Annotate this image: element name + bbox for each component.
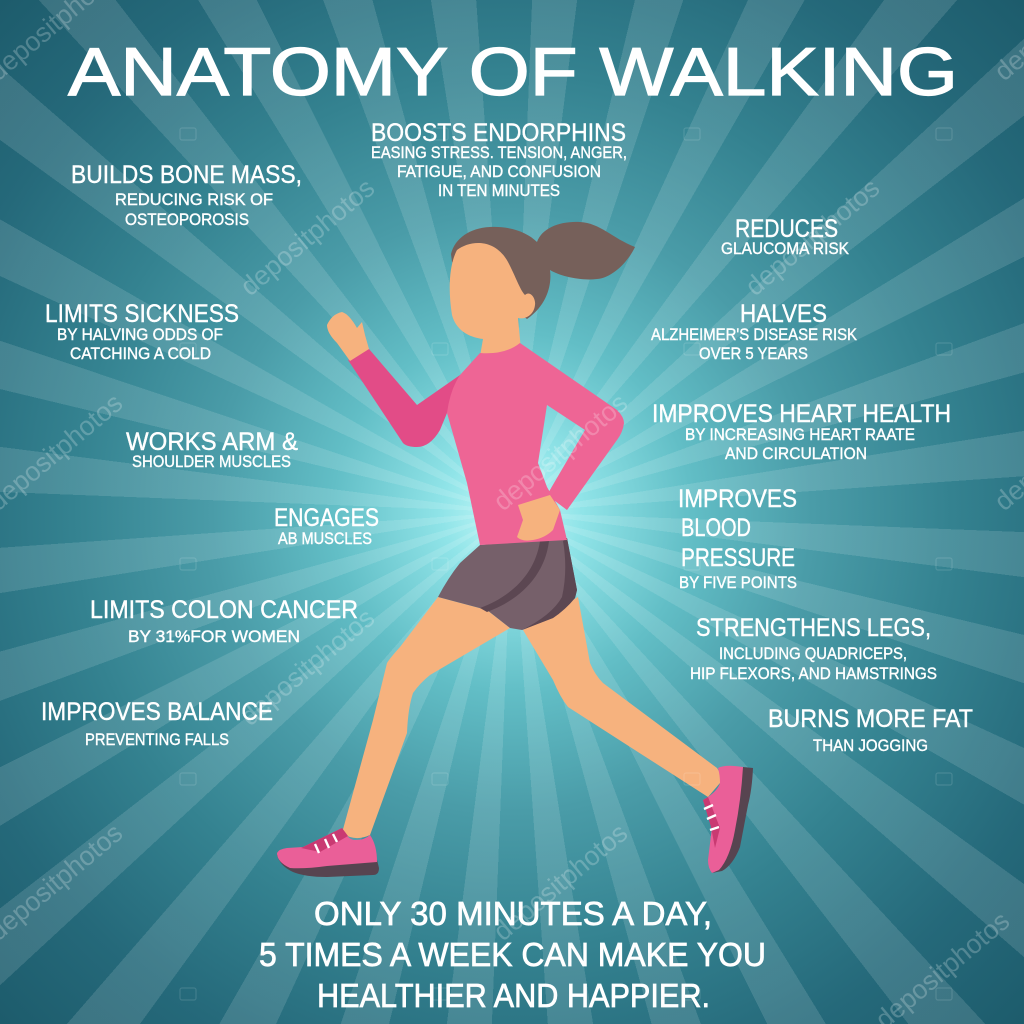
benefit: improves balance — [41, 698, 273, 749]
benefit: works arm and shoulder muscles: WORKS ARM & — [126, 428, 298, 456]
benefit: boosts endorphins: IN TEN MINUTES — [438, 182, 560, 200]
benefit: boosts endorphins: BOOSTS ENDORPHINS — [371, 119, 626, 147]
shorts — [438, 538, 577, 630]
face and neck — [450, 243, 535, 362]
watermarks: depositphotos — [740, 173, 885, 302]
benefit: improves blood pressure: BY FIVE POINTS — [679, 574, 797, 592]
benefit: burns more fat: THAN JOGGING — [813, 737, 928, 755]
back arm — [348, 349, 460, 447]
back leg — [523, 597, 721, 797]
benefit: burns more fat: BURNS MORE FAT — [768, 705, 973, 733]
benefit: boosts endorphins — [371, 119, 627, 200]
back hand — [327, 312, 369, 361]
benefit: halves alzheimer's risk: ALZHEIMER'S DISEASE RISK — [651, 326, 857, 344]
benefit: boosts endorphins: EASING STRESS. TENSION, ANGER, — [371, 144, 627, 162]
benefit: burns more fat — [768, 705, 973, 755]
hand on hip — [517, 495, 560, 541]
title: ANATOMY OF WALKING — [68, 34, 958, 110]
right shoe — [703, 766, 753, 873]
benefit: engages ab muscles: AB MUSCLES — [278, 530, 372, 548]
benefit: engages ab muscles — [274, 504, 379, 548]
closing message: HEALTHIER AND HAPPIER. — [317, 977, 710, 1014]
benefit: strengthens legs — [690, 614, 937, 683]
benefit: improves heart health: IMPROVES HEART HEALTH — [652, 400, 951, 428]
benefit: reduces glaucoma risk: GLAUCOMA RISK — [721, 240, 849, 258]
benefit: reduces glaucoma risk — [721, 215, 849, 258]
front leg — [342, 597, 510, 838]
benefit: reduces glaucoma risk: REDUCES — [735, 215, 838, 243]
watermarks: depositphotos — [235, 173, 380, 302]
benefit: improves heart health — [652, 400, 951, 463]
benefit: improves balance: PREVENTING FALLS — [85, 731, 229, 749]
benefit: limits sickness: BY HALVING ODDS OF — [57, 326, 223, 344]
benefit: boosts endorphins: FATIGUE, AND CONFUSION — [397, 163, 601, 181]
left shoe — [277, 828, 379, 877]
watermarks: depositphotos — [488, 388, 633, 517]
benefit: strengthens legs: HIP FLEXORS, AND HAMSTRINGS — [690, 665, 937, 683]
benefit: improves blood pressure: IMPROVES — [678, 485, 797, 513]
benefit: limits sickness: CATCHING A COLD — [70, 345, 211, 363]
benefit: builds bone mass: BUILDS BONE MASS, — [71, 161, 302, 189]
watermarks: depositphotos — [488, 818, 633, 947]
benefit: strengthens legs: STRENGTHENS LEGS, — [696, 614, 931, 642]
benefit: limits colon cancer: LIMITS COLON CANCER — [90, 596, 358, 624]
benefit: limits colon cancer: BY 31%FOR WOMEN — [128, 628, 300, 646]
shorts dark panels — [480, 538, 577, 630]
benefit: works arm and shoulder muscles: SHOULDER MUSCLES — [132, 453, 291, 471]
closing message: 5 TIMES A WEEK CAN MAKE YOU — [259, 936, 766, 973]
benefit: limits colon cancer — [90, 596, 358, 646]
benefit: works arm and shoulder muscles — [126, 428, 298, 471]
benefit: strengthens legs: INCLUDING QUADRICEPS, — [719, 645, 907, 663]
benefit: halves alzheimer's risk: OVER 5 YEARS — [699, 345, 808, 363]
benefit: halves alzheimer's risk — [651, 300, 857, 363]
benefit: improves blood pressure: BLOOD — [681, 514, 751, 542]
runner figure — [277, 222, 753, 877]
benefit: builds bone mass — [71, 161, 302, 229]
benefit: improves blood pressure — [678, 485, 797, 592]
benefit: improves blood pressure: PRESSURE — [681, 544, 795, 572]
watermarks: depositphotos — [235, 603, 380, 732]
benefit: halves alzheimer's risk: HALVES — [740, 300, 827, 328]
benefit: improves heart health: BY INCREASING HEART RAATE — [685, 426, 915, 444]
benefit: improves heart health: AND CIRCULATION — [725, 445, 867, 463]
hair and ponytail — [451, 222, 635, 319]
benefit: builds bone mass: OSTEOPOROSIS — [125, 211, 249, 229]
benefit: limits sickness — [45, 300, 239, 363]
closing message: ONLY 30 MINUTES A DAY, — [314, 895, 712, 932]
benefit: limits sickness: LIMITS SICKNESS — [45, 300, 239, 328]
benefit: improves balance: IMPROVES BALANCE — [41, 698, 273, 726]
closing message — [259, 895, 766, 1014]
sweater body and front arm — [447, 343, 624, 545]
benefit: engages ab muscles: ENGAGES — [274, 504, 379, 532]
benefit: builds bone mass: REDUCING RISK OF — [115, 191, 273, 209]
